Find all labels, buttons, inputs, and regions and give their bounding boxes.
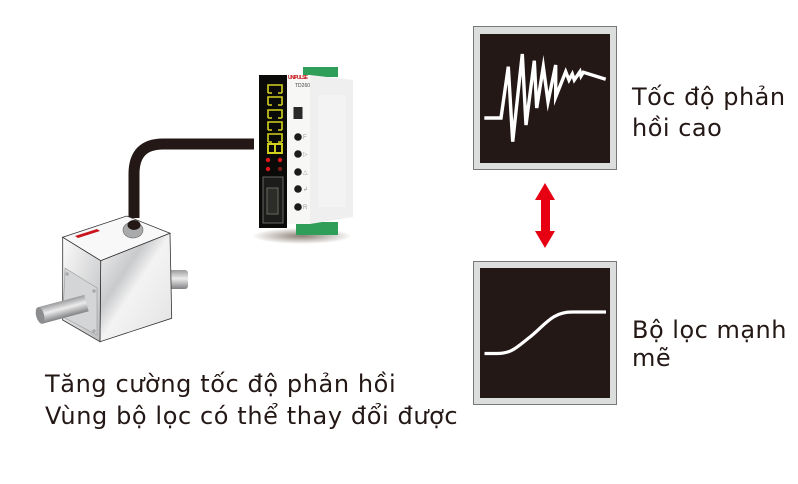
buttons (294, 133, 302, 211)
caption: Vùng bộ lọc có thể thay đổi được (45, 402, 458, 430)
green terminals (296, 67, 338, 235)
sensor right face (100, 233, 172, 342)
device front (287, 75, 310, 224)
device shadow (252, 228, 352, 244)
graph panel: strong filter (474, 262, 616, 404)
button letters: ▷ (303, 152, 308, 158)
graph panel: fast response (474, 26, 616, 170)
button letters: ↲ (303, 186, 308, 193)
label: strong filter: Bộ lọc mạnh (632, 316, 787, 344)
label: fast response (632, 83, 786, 142)
double arrow (535, 183, 555, 248)
model label: TD260 (295, 83, 310, 89)
cable (134, 144, 254, 218)
label: fast response: hồi cao (632, 114, 722, 142)
button letters (303, 135, 308, 211)
sensor left face (63, 237, 101, 342)
jagged response curve (484, 54, 606, 142)
sensor brand label (75, 229, 100, 238)
right shaft (168, 270, 188, 289)
caption: Tăng cường tốc độ phản hồi (45, 370, 396, 398)
label: strong filter: mẽ (632, 344, 671, 372)
USB port (294, 107, 302, 119)
button letters: F (303, 135, 307, 141)
caption (44, 370, 458, 430)
brand label: UNIPULSE (288, 75, 309, 81)
device side (310, 75, 353, 224)
smooth response curve (484, 312, 606, 354)
sensor top face (63, 216, 170, 261)
torque sensor (34, 216, 188, 342)
label: fast response: Tốc độ phản (632, 83, 786, 111)
button letters: R (303, 205, 308, 211)
label: strong filter (632, 316, 787, 372)
left shaft (34, 295, 89, 325)
display panel (259, 75, 287, 228)
connector (123, 220, 143, 238)
flange plate (63, 268, 97, 335)
button letters: △ (303, 170, 308, 176)
controller device (252, 67, 353, 244)
